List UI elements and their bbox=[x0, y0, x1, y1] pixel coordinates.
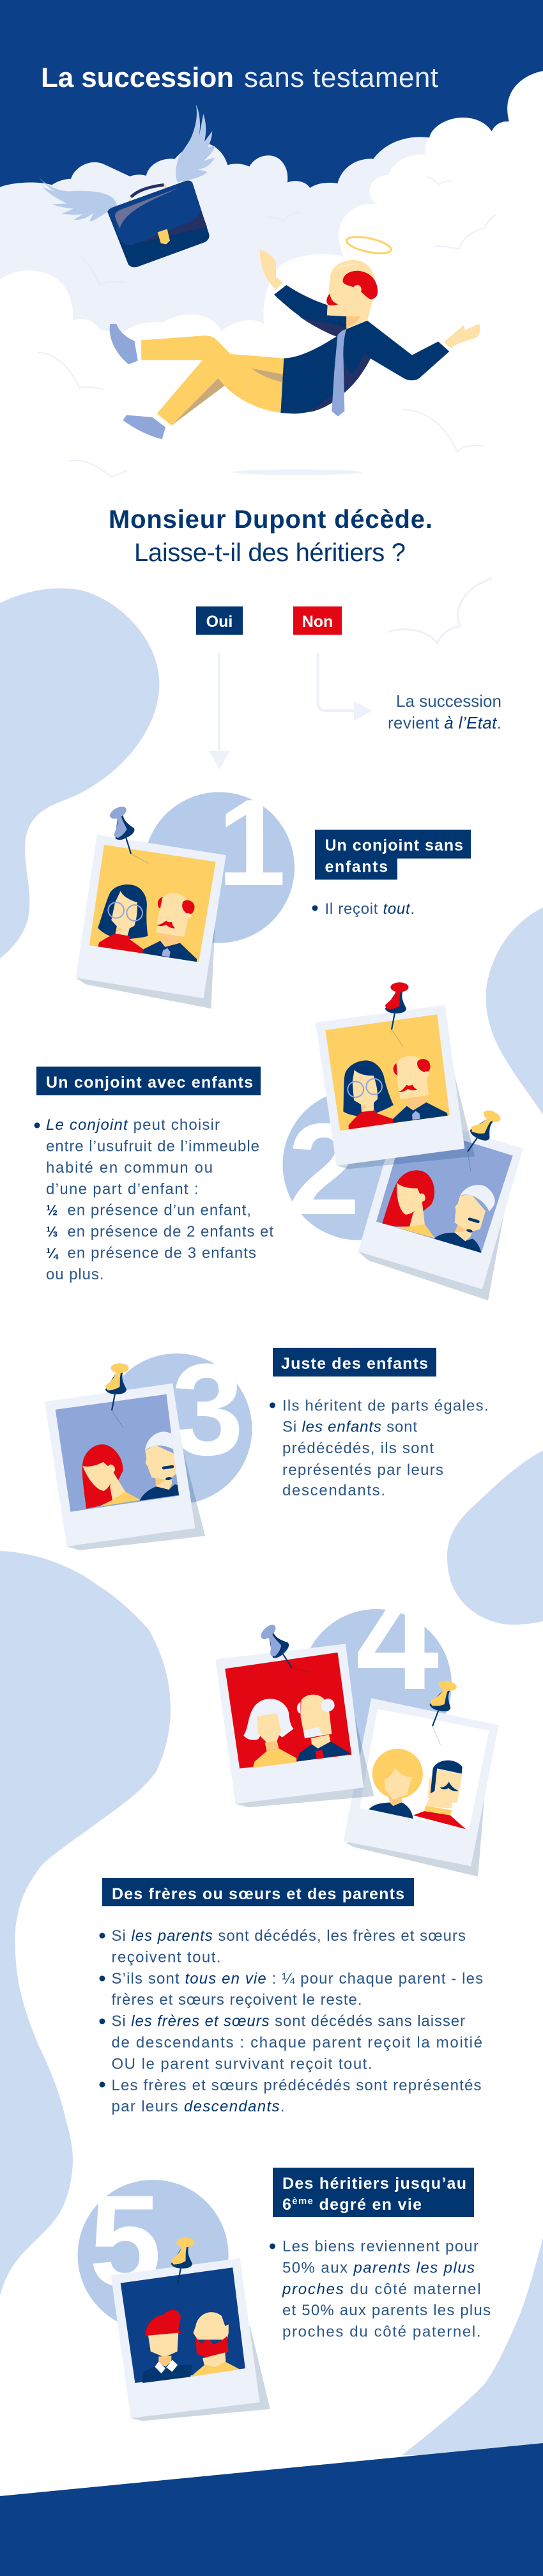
text 1: Il reçoit tout. bbox=[325, 900, 415, 918]
text 2: en présence d’un enfant, bbox=[68, 1202, 251, 1219]
text 4: Si les frères et sœurs sont décédés sans laisser bbox=[111, 2013, 465, 2030]
title: La succession bbox=[41, 62, 234, 93]
panel 2: un conjoint avec enfants bbox=[34, 1067, 273, 1283]
text 3: descendants. bbox=[282, 1482, 385, 1499]
header 4 bbox=[102, 1878, 414, 1906]
text 2: Le conjoint peut choisir bbox=[46, 1116, 220, 1134]
button: Non bbox=[293, 606, 342, 635]
text 2: ou plus. bbox=[46, 1266, 103, 1283]
text 5: 50% aux parents les plus bbox=[282, 2259, 475, 2276]
header 5: 6 bbox=[282, 2196, 291, 2214]
title light part: sans testament bbox=[244, 62, 438, 93]
panel 4: des frères ou soeurs et des parents bbox=[100, 1878, 483, 2115]
text: La succession revient à l'Etat bbox=[388, 691, 501, 732]
hero illustration bbox=[0, 0, 543, 479]
photo 6: white background couple bbox=[344, 1698, 499, 1877]
button: Oui: Oui bbox=[206, 613, 233, 631]
text 4: frères et sœurs reçoivent le reste. bbox=[111, 1991, 362, 2009]
text 2: entre l’usufruit de l’immeuble bbox=[46, 1138, 259, 1155]
text 2: en présence de 3 enfants bbox=[68, 1245, 256, 1261]
text 2: ¼ bbox=[46, 1245, 59, 1261]
text 2: ⅓ bbox=[46, 1224, 57, 1240]
header 3: Juste des enfants bbox=[281, 1355, 428, 1373]
button: Non: Non bbox=[302, 613, 333, 631]
figure: torso, head, arms and tie bbox=[274, 260, 480, 417]
number 5: 5 bbox=[89, 2168, 162, 2314]
pin 4 bbox=[105, 1363, 129, 1428]
photo 2: couple bbox=[316, 1005, 475, 1169]
decorative cloud outline bbox=[388, 578, 492, 643]
text 3 bbox=[270, 1397, 488, 1499]
text 3: Si les enfants sont bbox=[282, 1419, 417, 1435]
header 1 bbox=[315, 829, 471, 879]
header 5: Des héritiers jusqu’au bbox=[282, 2175, 466, 2193]
text 4: Les frères et sœurs prédécédés sont représentés bbox=[111, 2077, 482, 2094]
footer band bbox=[0, 2443, 543, 2576]
pin 5 bbox=[254, 1623, 316, 1685]
text 4 bbox=[100, 1927, 483, 2115]
panel 1: un conjoint sans enfants bbox=[312, 829, 471, 918]
header 1: enfants bbox=[325, 858, 388, 876]
header 5: ème bbox=[292, 2196, 313, 2207]
text 4: S’ils sont tous en vie : ¼ pour chaque parent - les bbox=[111, 1970, 483, 1987]
button: Oui bbox=[196, 606, 243, 635]
pin 2 bbox=[385, 982, 409, 1047]
photo 7: navy background couple bbox=[111, 2258, 270, 2421]
text 2: habité en commun ou bbox=[46, 1159, 213, 1176]
number 1: 1 bbox=[217, 773, 286, 911]
text 2 bbox=[34, 1116, 273, 1283]
pin 7 bbox=[171, 2237, 195, 2302]
header 2: Un conjoint avec enfants bbox=[46, 1074, 253, 1091]
heading: Monsieur Dupont: Monsieur Dupont décède. bbox=[109, 505, 432, 534]
arrow: Non bbox=[318, 653, 372, 721]
text: La succession revient à l'Etat: revient à l’Etat. bbox=[388, 713, 501, 732]
header 3 bbox=[273, 1348, 436, 1377]
text 3: prédécédés, ils sont bbox=[282, 1440, 434, 1457]
text 4: par leurs descendants. bbox=[111, 2098, 285, 2115]
text 4: OU le parent survivant reçoit tout. bbox=[111, 2055, 372, 2072]
text 3: représentés par leurs bbox=[282, 1462, 443, 1479]
text 2: ½ bbox=[46, 1203, 57, 1219]
text 2: en présence de 2 enfants et bbox=[68, 1223, 273, 1240]
number circles bbox=[78, 792, 452, 2331]
text 5: et 50% aux parents les plus bbox=[282, 2302, 491, 2319]
figure: halo, legs, shoes and left hand bbox=[110, 234, 393, 439]
number 3: 3 bbox=[171, 1337, 244, 1483]
clouds bbox=[0, 71, 543, 479]
heading: question: Laisse-t-il des héritiers ? bbox=[134, 539, 406, 567]
header 4: Des frères ou sœurs et des parents bbox=[112, 1885, 404, 1903]
decorative blobs bbox=[0, 589, 543, 2455]
photo 1: couple bbox=[55, 818, 254, 1021]
number 2: 2 bbox=[287, 1097, 360, 1242]
header 1: Un conjoint sans bbox=[325, 837, 463, 854]
text 5: proches du côté paternel. bbox=[282, 2324, 481, 2341]
header 2 bbox=[36, 1067, 261, 1095]
text 5: proches du côté maternel bbox=[282, 2281, 481, 2298]
pin 6 bbox=[423, 1679, 457, 1746]
arrow: Oui bbox=[209, 653, 230, 769]
text 4: Si les parents sont décédés, les frères et sœurs bbox=[111, 1927, 466, 1945]
pin 3 bbox=[455, 1106, 502, 1174]
header 5: degré en vie bbox=[314, 2196, 422, 2214]
photo 3: child couple bbox=[358, 1130, 523, 1300]
photo 4: child couple bbox=[45, 1383, 206, 1550]
text 2: d’une part d’enfant : bbox=[46, 1181, 198, 1198]
text 5 bbox=[270, 2238, 491, 2341]
icon: flying briefcase bbox=[38, 104, 215, 267]
photo 5: red background couple bbox=[215, 1644, 374, 1807]
text 4: de descendants : chaque parent reçoit la moitié bbox=[111, 2034, 482, 2051]
sky bbox=[0, 0, 543, 217]
number 4: 4 bbox=[356, 1553, 439, 1721]
text: La succession revient à l'Etat: La succession bbox=[396, 691, 501, 711]
panel 3: juste des enfants bbox=[270, 1348, 488, 1499]
pin 1 bbox=[103, 804, 154, 872]
header 5 bbox=[273, 2168, 474, 2217]
panel 5: héritiers jusqu'au 6e degré bbox=[270, 2168, 491, 2341]
text 4: reçoivent tout. bbox=[111, 1948, 221, 1966]
text 5: Les biens reviennent pour bbox=[282, 2238, 478, 2255]
text 3: Ils héritent de parts égales. bbox=[282, 1397, 488, 1415]
